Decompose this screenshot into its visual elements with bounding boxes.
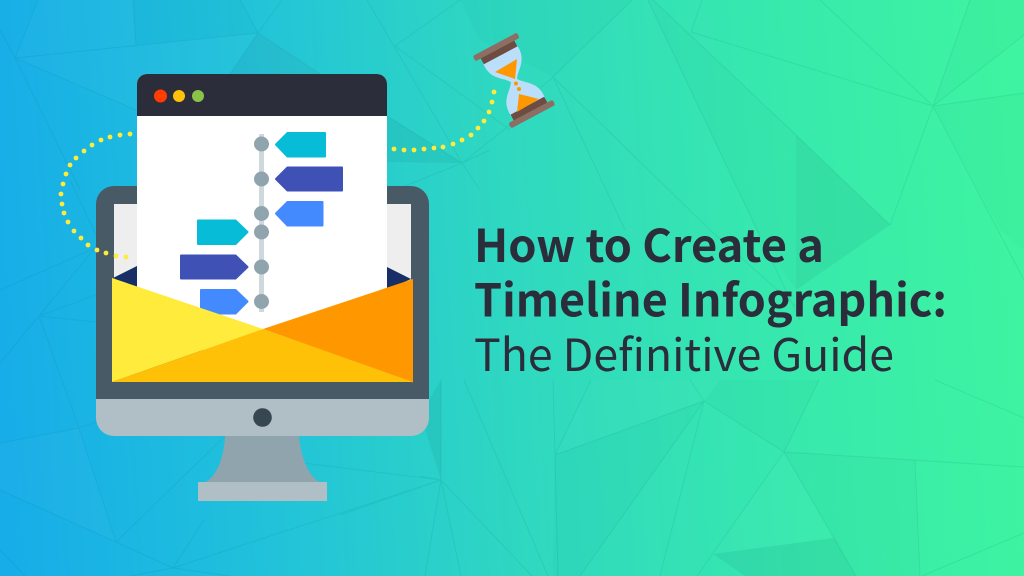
timeline tag: left 1 — [198, 220, 248, 244]
icon: hourglass — [473, 33, 555, 128]
timeline tag: right 2 — [276, 168, 342, 190]
monitor stand — [198, 436, 327, 501]
envelope front flaps — [112, 278, 413, 382]
title line 1: How to Create a — [474, 210, 824, 275]
timeline tag: right 1 — [276, 133, 325, 156]
timeline tag: right 3 — [276, 202, 322, 226]
window button: red — [154, 90, 167, 102]
timeline tag: left 3 — [201, 290, 248, 314]
dotted path: right arc to hourglass — [392, 90, 496, 152]
timeline chart — [181, 133, 342, 314]
timeline tag: left 2 — [181, 256, 248, 278]
subtitle: The Definitive Guide — [474, 319, 894, 384]
envelope back: navy inner — [113, 266, 411, 290]
title — [474, 210, 947, 384]
window button: yellow — [173, 90, 185, 102]
monitor body — [96, 186, 429, 436]
browser window — [137, 74, 387, 350]
window button: green — [192, 90, 204, 102]
title line 2: Timeline Infographic: — [474, 264, 947, 330]
dotted path: left loop — [59, 132, 132, 247]
dotted path: left loop end over monitor — [95, 248, 128, 259]
